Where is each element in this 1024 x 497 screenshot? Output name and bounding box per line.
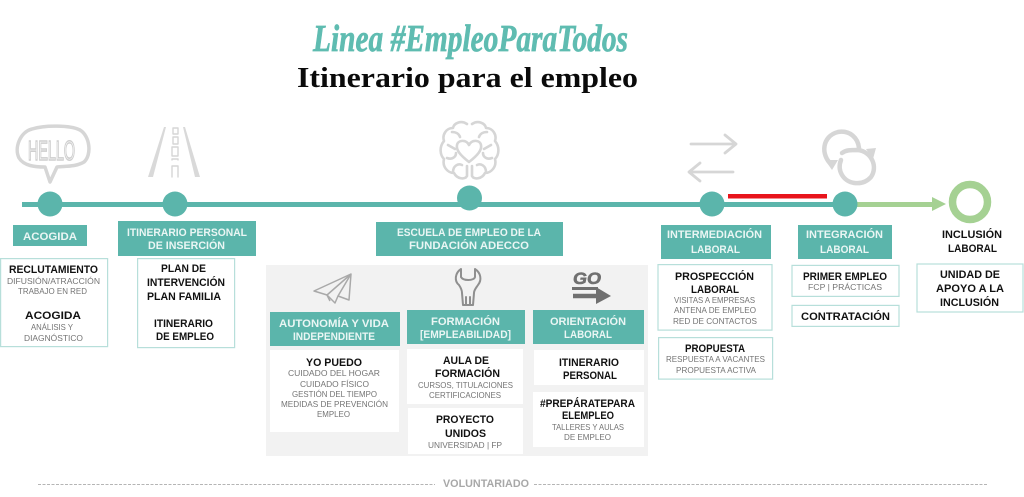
card: yo puedo [270,350,399,432]
icon: brain with heart [441,122,498,178]
header: intermediación laboral: LABORAL [691,244,740,256]
card: itinerario personal: ITINERARIO [559,357,619,369]
panel: reclutamiento y acogida: DIFUSIÓN/ATRACCIÓN [7,276,100,286]
panel: reclutamiento y acogida: RECLUTAMIENTO [9,264,98,276]
timeline: main teal line [22,202,847,207]
card: yo puedo: YO PUEDO [306,357,362,369]
card: proyecto unidos: UNIDOS [445,428,486,440]
header: formación: [EMPLEABILIDAD] [420,329,511,341]
card: prepárate para el empleo: ELEMPLEO [562,410,614,422]
timeline node: acogida [38,192,62,216]
icon: wrench [456,269,480,305]
header: integración laboral: INTEGRACIÓN [806,228,883,241]
header: autonomía: AUTONOMÍA Y VIDA [279,317,389,330]
icon: interlinked circular arrows [824,132,876,183]
header: acogida: ACOGIDA [23,231,77,243]
header: itinerario personal de inserción: ITINERARIO PERSONAL [127,227,247,239]
panel: prospección laboral: RED DE CONTACTOS [673,316,757,326]
header: intermediación laboral: INTERMEDIACIÓN [667,228,762,241]
icon: go arrow [572,269,611,304]
panel: plan de intervención: PLAN DE [161,263,206,275]
header: escuela de empleo: ESCUELA DE EMPLEO DE LA [397,227,541,239]
card: yo puedo: CUIDADO DEL HOGAR [288,368,380,378]
card: aula de formación: AULA DE [443,355,489,367]
panel: unidad de apoyo a la inclusión: UNIDAD DE [940,269,1000,281]
red bar [728,194,827,198]
panel: primer empleo: FCP | PRÁCTICAS [808,282,882,292]
header: formación [407,310,525,344]
card: aula de formación: FORMACIÓN [435,367,500,380]
card: yo puedo: CUIDADO FÍSICO [300,379,369,389]
header: itinerario personal de inserción [118,221,256,256]
card: proyecto unidos: UNIVERSIDAD | FP [428,440,502,450]
panel: prospección laboral: PROSPECCIÓN [675,270,754,283]
header: orientación: LABORAL [564,329,612,341]
panel: unidad de apoyo a la inclusión [917,264,1023,312]
timeline node: itinerario [162,192,188,216]
panel: prospección laboral [658,265,772,330]
title: Linea #EmpleoParaTodos: Linea #EmpleoParaTodos [312,18,628,60]
panel: unidad de apoyo a la inclusión: APOYO A LA [936,283,1004,295]
card: itinerario personal [534,350,644,385]
card: aula de formación: CERTIFICACIONES [429,390,501,400]
panel: reclutamiento y acogida: TRABAJO EN RED [18,286,87,296]
header: integración laboral: LABORAL [820,244,869,256]
panel: propuesta [659,338,773,379]
panel: contratación: CONTRATACIÓN [801,310,890,323]
panel: plan de intervención: INTERVENCIÓN [147,276,225,289]
panel: plan de intervención: DE EMPLEO [156,331,214,343]
card: aula de formación [407,349,523,404]
heading: inclusión laboral: INCLUSIÓN [942,228,1002,241]
panel: escuela de empleo grey background [266,265,648,456]
card: prepárate para el empleo: #PREPÁRATEPARA [540,397,635,410]
heading: inclusión laboral [942,228,1002,255]
timeline: green arrow [855,197,946,211]
panel: reclutamiento y acogida: DIAGNÓSTICO [24,333,83,343]
card: prepárate para el empleo: DE EMPLEO [564,432,611,442]
panel: propuesta: PROPUESTA [685,343,745,355]
panel: primer empleo: PRIMER EMPLEO [803,271,887,283]
header: orientación [533,310,644,344]
panel: plan de intervención: ITINERARIO [154,318,213,330]
card: yo puedo: MEDIDAS DE PREVENCIÓN [281,399,388,409]
icon: hello speech bubble [17,126,89,182]
panel: propuesta: RESPUESTA A VACANTES [666,354,765,364]
header: integración laboral [798,225,892,259]
icon: hello speech bubble: HELLO [28,135,75,166]
panel: reclutamiento y acogida: ANÁLISIS Y [31,322,73,332]
header: autonomía [270,312,400,346]
card: itinerario personal: PERSONAL [563,370,617,382]
panel: contratación [792,305,899,326]
header: escuela de empleo [376,222,563,256]
panel: reclutamiento y acogida: ACOGIDA [25,310,81,322]
panel: propuesta: PROPUESTA ACTIVA [676,365,756,375]
card: prepárate para el empleo: TALLERES Y AULAS [552,422,624,432]
panel: prospección laboral: VISITAS A EMPRESAS [674,295,755,305]
header: escuela de empleo: FUNDACIÓN ADECCO [409,239,529,252]
heading: inclusión laboral: LABORAL [948,243,997,255]
header: intermediación laboral [661,225,771,259]
panel: unidad de apoyo a la inclusión: INCLUSIÓN [940,296,999,309]
panel: reclutamiento y acogida [1,259,108,347]
ring: inclusión laboral [952,184,988,220]
timeline node: escuela [457,186,482,210]
card: yo puedo: EMPLEO [317,409,350,419]
panel: prospección laboral: LABORAL [691,284,739,296]
timeline node: intermediación [700,192,724,216]
card: yo puedo: GESTIÓN DEL TIEMPO [292,389,377,399]
card: aula de formación: CURSOS, TITULACIONES [418,380,513,390]
header: itinerario personal de inserción: DE INSERCIÓN [148,239,225,252]
card: proyecto unidos [408,408,523,454]
card: prepárate para el empleo [533,392,644,447]
timeline node: integración [832,192,858,216]
header: acogida [13,225,87,246]
icon: arrows in opposite directions [689,135,736,181]
panel: plan de intervención [138,259,235,348]
footer: voluntariado: VOLUNTARIADO [443,478,529,490]
icon: paper plane [314,274,351,303]
card: proyecto unidos: PROYECTO [436,414,494,426]
panel: prospección laboral: ANTENA DE EMPLEO [674,305,756,315]
icon: road [148,127,200,177]
panel: plan de intervención: PLAN FAMILIA [147,291,221,303]
panel: primer empleo [792,265,899,296]
icon: go arrow: GO [573,269,601,288]
header: orientación: ORIENTACIÓN [550,315,626,328]
subtitle: Itinerario para el empleo: Itinerario para el empleo [297,63,638,94]
header: formación: FORMACIÓN [431,315,500,328]
header: autonomía: INDEPENDIENTE [293,331,375,343]
